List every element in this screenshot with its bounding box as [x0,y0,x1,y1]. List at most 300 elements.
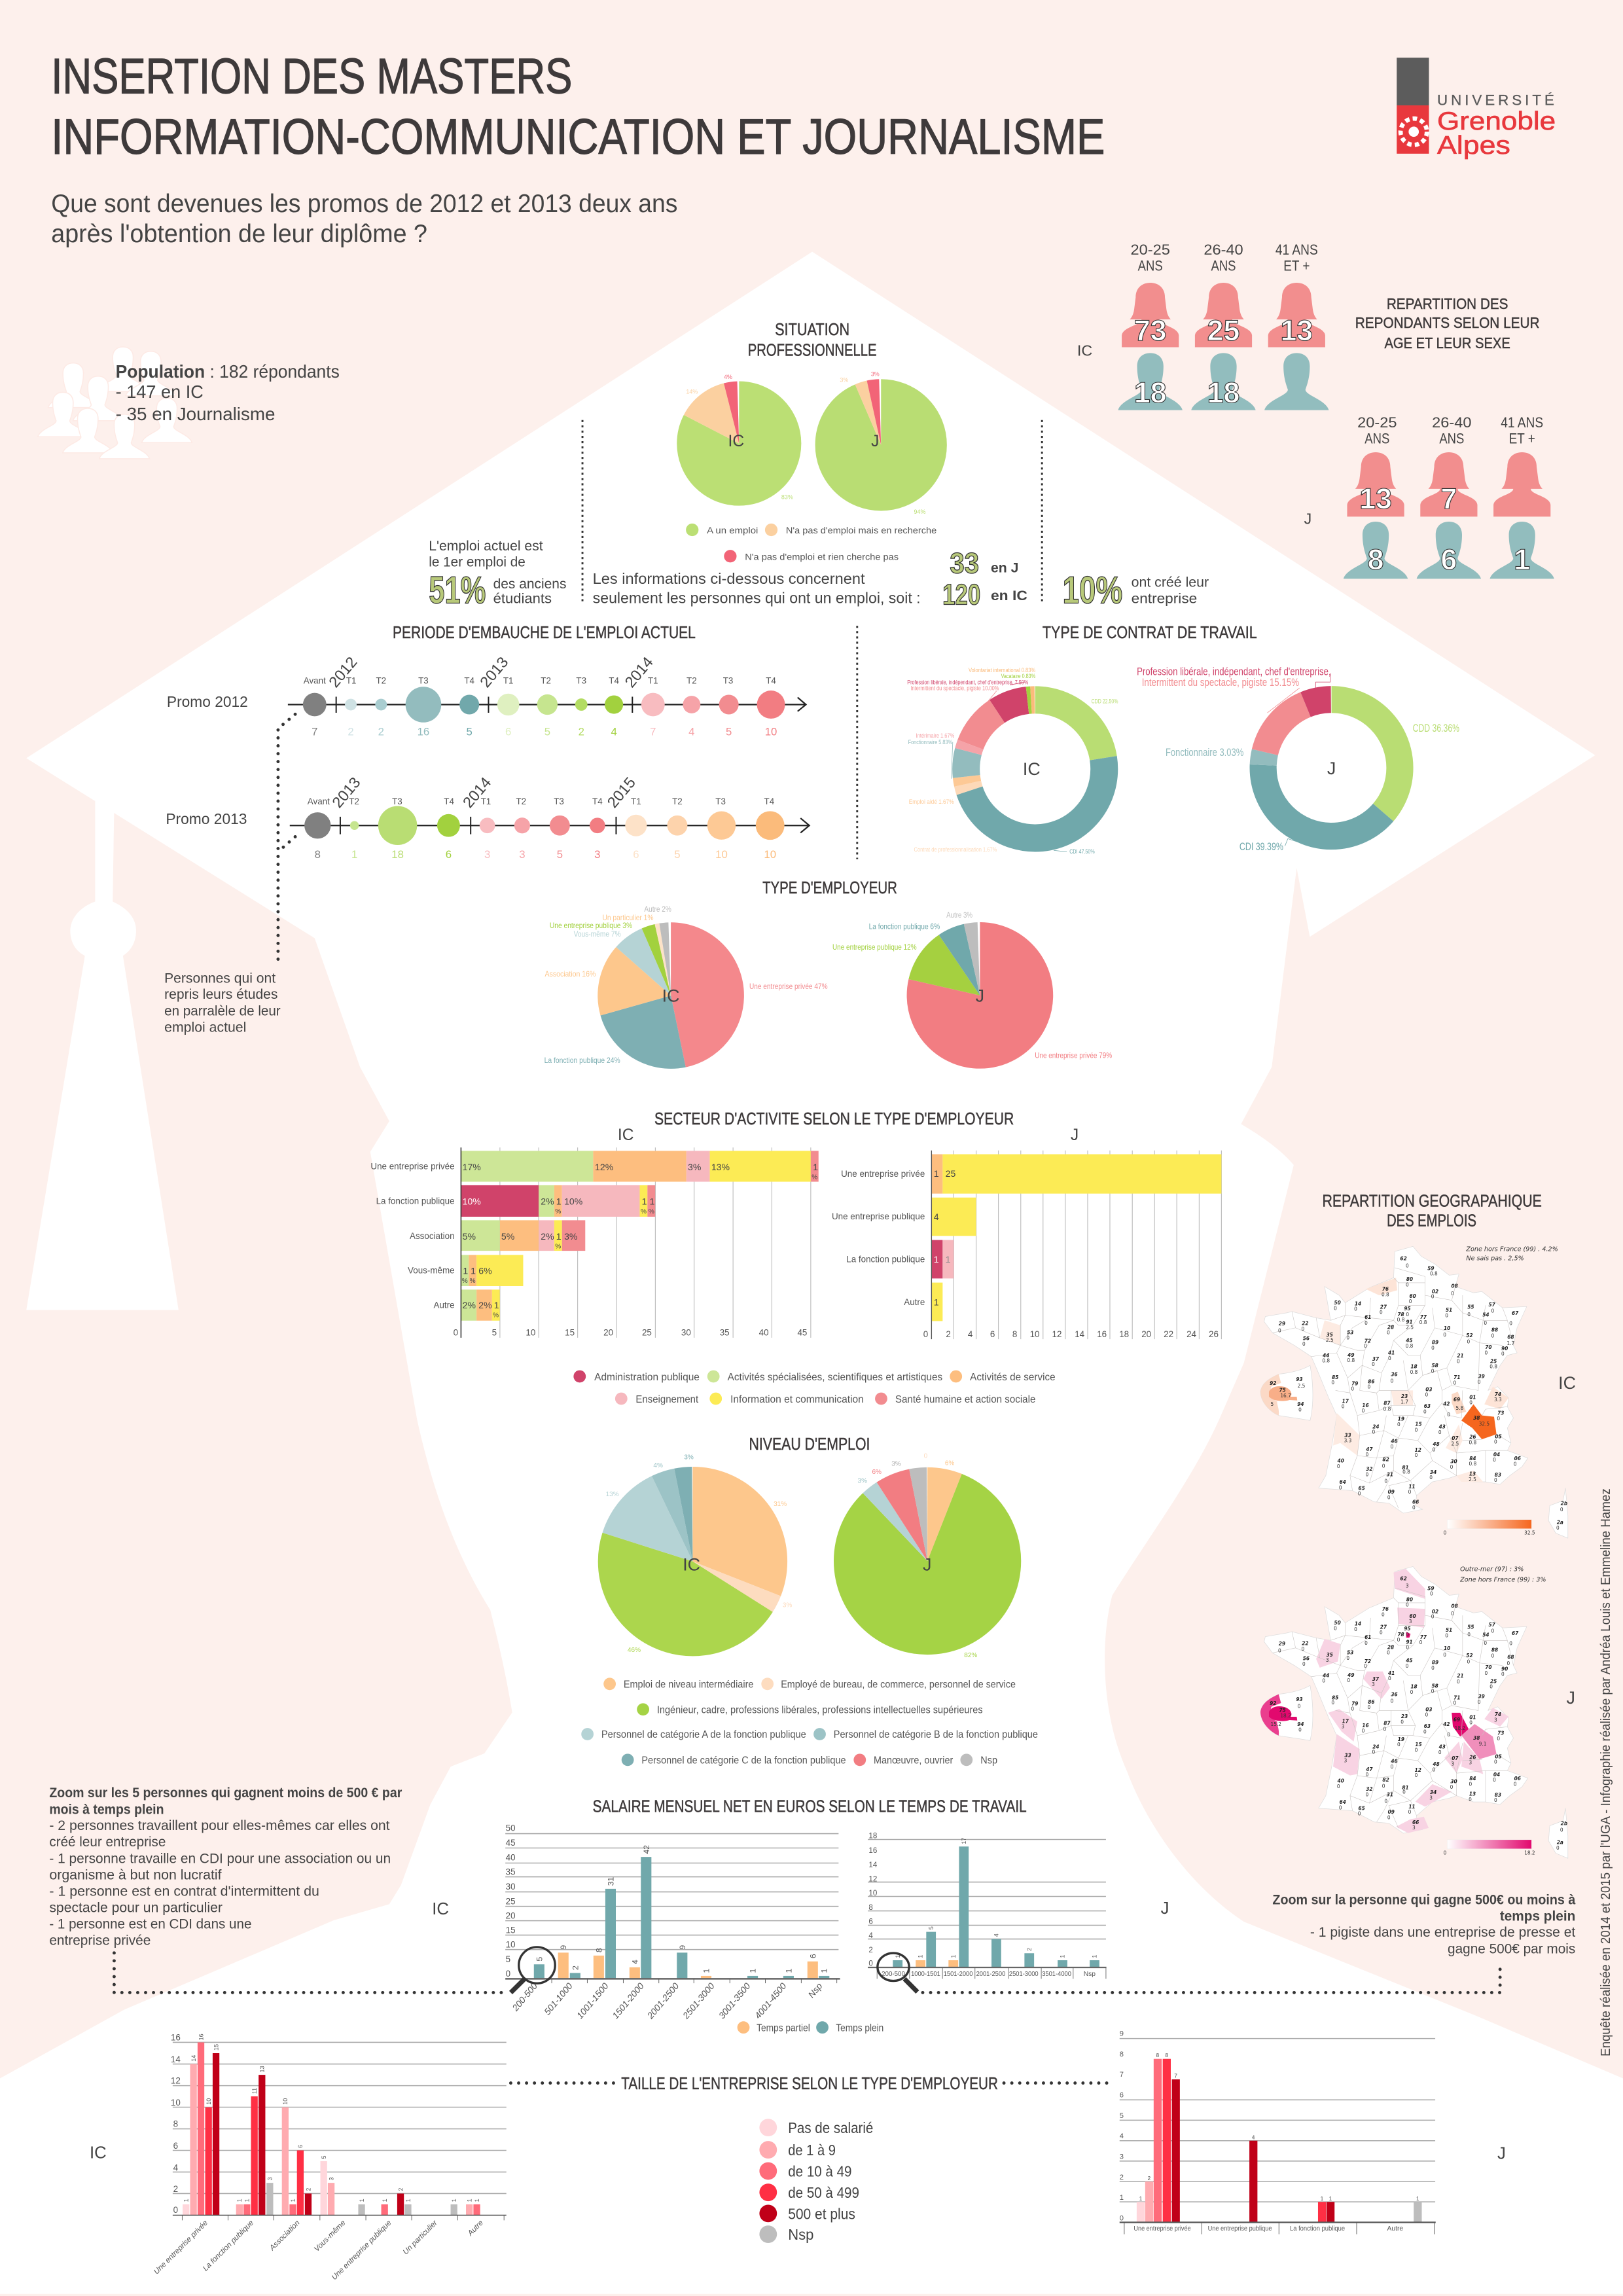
text: resumed studies [164,971,281,1035]
map: France IC: 0 [1484,1320,1487,1326]
timeline: promo 2012: T3 [576,675,586,685]
map: France IC: 0 [1560,1507,1563,1513]
map: France IC: 0 [1372,1361,1375,1367]
colour scale J: 18.2 [1524,1850,1535,1856]
map: France IC: 90 [1501,1346,1508,1352]
age groups J: 26-40 [1432,414,1472,431]
bar chart: salaire IC: 45 [506,1838,516,1848]
text: zoom 5 persons: organisme à but non lucratif [49,1867,222,1882]
bar chart: taille IC: 14 [171,2054,181,2064]
map: France J: 69 [1454,1717,1460,1723]
map: France J: 3 [1326,1657,1329,1663]
map: France IC: 0.8 [1383,1406,1391,1412]
timeline: promo 2012: 2 [378,726,384,738]
credit vertical: Enquête réalisée en 2014 et 2015 par l'UGA - Infographie réalisée par Andréa Louis et Emmeline Hamez [1598,1488,1613,2056]
map: France IC: 11 [1408,1484,1416,1490]
stacked bar chart: secteur IC: % [555,1208,561,1215]
bar chart: salaire J: 8 [868,1903,873,1912]
map: France IC: 0 [1457,1359,1460,1365]
map: France J: 13 [1469,1791,1476,1797]
bar chart: salaire IC: 15 [506,1926,516,1935]
map: France J: 15.2 [1271,1721,1281,1727]
map: France IC: 16.7 [1280,1393,1291,1399]
map: France J: 87 [1383,1721,1391,1727]
text: zoom 1 person: - 1 pigiste dans une entreprise de presse et [1310,1925,1576,1940]
heading: type d'employeur: TYPE D'EMPLOYEUR [762,879,897,897]
map: France IC: 0 [1412,1505,1416,1511]
map: France J: 0 [1382,1611,1385,1618]
map: France IC: 0 [1362,1408,1365,1414]
legend: taille entreprise: de 1 à 9 [788,2142,836,2159]
map: France J: 61 [1364,1634,1371,1640]
bar chart: taille IC: 3 [267,2178,274,2181]
map: France J: 66 [1412,1820,1419,1825]
bar chart: taille J: Une entreprise privée [1133,2225,1191,2233]
note: employed only: en IC [991,588,1027,603]
map: France IC: 45 [1406,1337,1413,1344]
map: France IC: 0 [1358,1490,1361,1496]
map: France IC: 72 [1364,1338,1371,1344]
timeline: promo 2013: 2015 [604,774,639,811]
map: France IC: 57 [1488,1302,1495,1308]
map: France J: 09 [1388,1809,1395,1815]
map: France J: 0 [1560,1827,1563,1833]
bar chart: salaire IC: 0 [506,1969,510,1979]
donut labels IC: Vacataire 0.83% [1001,673,1035,679]
map: France J: 2a [1557,1839,1563,1845]
map: France IC: 87 [1383,1400,1391,1407]
stacked bar chart: secteur J: 8 [1012,1329,1017,1339]
text: resumed studies: emploi actuel [164,1020,246,1035]
text: zoom 5 persons: - 1 personne travaille en CDI pour une association ou un [49,1851,391,1866]
bar chart: salaire IC: 1501-2000 [610,1981,646,2020]
age groups J: 1 [1514,544,1530,576]
timeline: promo 2012: 2012 [325,654,361,691]
map: France IC: 0 [1366,1471,1368,1477]
bar chart: taille J: 5 [1120,2112,1124,2120]
stat: 10% created a company: ont créé leur [1132,575,1209,590]
heading: situation professionnelle: SITUATION [775,321,849,339]
bar chart: taille J: 7 [1174,2073,1177,2079]
donut labels IC: IC [1023,759,1041,779]
map: France J: 0 [1406,1632,1409,1638]
map: France IC: 15 [1415,1422,1422,1427]
map: France J: 18.2 [1455,1725,1465,1731]
timeline: promo 2013: T2 [672,797,683,806]
legend: niveau: Manœuvre, ouvrier [874,1755,953,1766]
timeline: promo 2013: T3 [715,797,726,806]
bar chart: salaire J: 2 [1026,1948,1033,1951]
timeline: promo 2013: 10 [764,848,776,861]
map: France IC: 0 [1431,1345,1435,1351]
bar chart: salaire IC: 4001-4500 [753,1981,789,2020]
stacked bar chart: secteur IC: % [641,1208,647,1215]
map: France J: 0 [1494,1759,1497,1765]
stacked bar chart: secteur IC: 2% [541,1196,554,1206]
map: France IC: 50 [1334,1300,1341,1306]
map: France IC: 0.8 [1410,1369,1418,1375]
stat: 51% first job: des anciens [493,576,566,592]
map: France J: 0 [1298,1727,1302,1733]
map: France J: 0 [1339,1804,1342,1811]
map: France J: 82 [1382,1777,1389,1783]
bar chart: taille J: 4 [1252,2134,1255,2140]
stacked bar chart: secteur IC: 20 [603,1328,613,1338]
bar chart: taille IC: 1 [183,2198,189,2202]
timeline: promo 2013: T2 [349,797,359,806]
map: France J: 51 [1446,1627,1452,1633]
employeur J labels: J [976,986,984,1006]
bar chart: taille IC: Une entreprise privée [152,2218,209,2276]
donut labels IC: CDI 47.50% [1069,848,1095,855]
map: France IC: 47 [1366,1446,1373,1452]
timeline: promo 2012: T3 [723,675,733,685]
timeline: promo 2012: T2 [687,675,697,685]
map: France IC: 0 [1366,1452,1368,1458]
situation legend: N'a pas d'emploi mais en recherche [786,526,936,535]
map: France J: 56 [1303,1655,1310,1662]
map: France IC: 22 [1302,1320,1309,1327]
map: France J: 0 [1489,1683,1493,1689]
map: France J: 75 [1279,1707,1286,1713]
map: France IC: 0 [1334,1305,1337,1312]
bar chart: taille IC: Vous-même [312,2218,348,2253]
map: France IC: 1.7 [1400,1399,1408,1405]
map: France IC: 0.8 [1382,1291,1389,1298]
map: France IC: 0 [1406,1312,1409,1318]
map: France J: 0 [1467,1632,1471,1638]
map: France IC: 32.5 [1479,1421,1489,1427]
bar chart: salaire J: 0 [868,1959,873,1967]
bar chart: salaire J: 16 [868,1846,877,1855]
map: France IC: 0 [1406,1263,1409,1269]
timeline: promo 2013: Promo 2013 [166,810,247,827]
map: France IC: 27 [1380,1304,1387,1310]
stacked bar chart: secteur IC: 0 [454,1328,458,1338]
map: France J: 22 [1302,1640,1309,1647]
situation legend: A un emploi [707,526,758,535]
map: France IC: 0 [1501,1351,1505,1357]
map: France J: 40 [1338,1778,1344,1784]
timeline: promo 2013: Avant [308,797,330,806]
donut labels J: Fonctionnaire 3.03% [1166,746,1243,759]
stacked bar chart: secteur J: 4 [934,1211,939,1222]
bar chart: salaire J: 14 [868,1861,878,1869]
legend: niveau: Nsp [980,1755,997,1766]
IC and J map labels: IC [1558,1373,1576,1393]
bar chart: salaire IC: 25 [506,1896,516,1906]
map: France IC: 0 [1494,1439,1497,1445]
map: France J: 70 [1485,1664,1492,1670]
stacked bar chart: secteur IC: 15 [565,1328,575,1338]
text: zoom 1 person: Zoom sur la personne qui gagne 500€ ou moins à [1272,1892,1576,1907]
bar chart: salaire J: 2501-3000 [1009,1971,1039,1978]
map: France IC: 0 [1429,1475,1433,1480]
map: France J [1260,1566,1568,1858]
timeline: promo 2012: T1 [503,675,513,685]
heading: niveau d'emploi: NIVEAU D'EMPLOI [749,1435,870,1454]
age groups J: ANS [1364,431,1389,447]
bar chart: taille J: 8 [1120,2051,1124,2058]
map: France J: 0 [1509,1640,1512,1647]
bar chart: taille J: 6 [1120,2092,1124,2100]
map: France J: 50 [1334,1620,1341,1626]
text: zoom 5 persons [49,1785,402,1948]
stacked bar chart: secteur J: 24 [1186,1329,1197,1339]
bar chart: taille IC: 3 [328,2178,334,2181]
note IC outside France: Zone hors France (99) . 4.2% [1465,1246,1558,1253]
timeline: promo 2012: 2 [579,726,584,738]
map: France IC: 29 [1279,1321,1285,1327]
map: France J: 0 [1457,1679,1460,1685]
map: France J: 0 [1497,1736,1500,1742]
map: France J: 43 [1439,1744,1446,1750]
legend: taille entreprise: Pas de salarié [788,2119,873,2136]
age heading: REPARTITION DES [1387,295,1508,312]
pie: niveau IC [645,1514,740,1609]
map: France IC: 0 [1339,1484,1342,1491]
map: France J: 18.2 [1280,1713,1291,1719]
map: France J: 54 [1482,1632,1489,1638]
map: France J: 67 [1512,1630,1519,1636]
map: France J: 95 [1404,1626,1411,1632]
timeline: promo 2013: T2 [516,797,526,806]
label IC taille: IC [90,2144,107,2162]
stacked bar chart: secteur IC: 45 [797,1328,807,1338]
map: France J: 0 [1469,1797,1472,1803]
bar chart: taille IC: Association [268,2219,302,2253]
map: France IC: 0 [1485,1350,1488,1356]
map: France IC: 0 [1354,1306,1357,1312]
map: France IC: 0 [1380,1310,1383,1316]
map: France J: 0 [1388,1676,1391,1681]
pie: employeur IC [634,959,707,1032]
timeline: promo 2012: T2 [376,675,386,685]
map: France J: 38 [1473,1735,1480,1741]
map: France J: 44 [1323,1672,1329,1679]
map: France J: 0 [1423,1729,1427,1735]
map: France IC: 0 [1364,1320,1368,1326]
map: France J: 62 [1400,1575,1407,1582]
employeur IC labels: IC [662,986,680,1006]
bar chart: salaire IC: 40 [506,1852,516,1862]
map: France IC: 83 [1495,1472,1501,1478]
map: France J: 10 [1444,1645,1450,1651]
map: France J: 0 [1302,1646,1304,1652]
legend: secteurs [573,1371,1056,1405]
map: France J: 0 [1351,1706,1354,1712]
map: France J: 0 [1368,1704,1370,1710]
map: France J: 14 [1355,1621,1361,1626]
map: France J: 57 [1488,1622,1495,1628]
legend: taille entreprise: Nsp [788,2226,813,2243]
text: zoom 1 person: temps plein [1500,1909,1575,1924]
map: France J: 0 [1451,1611,1454,1617]
bar chart: taille IC: 6 [173,2141,178,2151]
map: France J: 0 [1331,1700,1334,1706]
map: France IC: 0 [1351,1386,1354,1391]
map: France IC: 18 [1410,1363,1418,1369]
niveau IC labels: 3% [783,1602,792,1609]
map: France J: 3 [1409,1619,1412,1624]
map: France IC: 0.8 [1430,1270,1438,1276]
text: resumed studies: repris leurs études [164,987,277,1002]
legend: taille entreprise: de 50 à 499 [788,2184,859,2201]
stacked bar chart: secteur IC: 1 [494,1300,499,1310]
map: France J: 84 [1469,1776,1476,1782]
map: France J: 05 [1495,1753,1502,1760]
map: France J: 72 [1364,1659,1371,1664]
map: France IC: 2.5 [1406,1325,1414,1331]
stacked bar chart: secteur J: 1 [946,1254,951,1265]
map: France J: 0 [1501,1671,1505,1677]
map: France IC: 0 [1450,1464,1454,1470]
bar chart: taille IC: 1 [382,2198,388,2202]
map: France J: 65 [1358,1805,1365,1811]
map: France J: 0 [1391,1698,1394,1704]
bar chart: taille J: 8 [1156,2053,1160,2058]
map: France IC: 0 [1494,1477,1497,1483]
bar chart: taille IC: 2 [305,2188,312,2191]
age groups IC: 18 [1134,377,1167,409]
map: France J: 77 [1420,1634,1427,1640]
timeline: promo 2013 [166,774,810,861]
map: France J: 0 [1514,1782,1517,1787]
map: France J: 9.1 [1479,1741,1487,1747]
map: France J: 42 [1443,1721,1450,1727]
legend: secteurs: Santé humaine et action sociale [895,1394,1035,1405]
stacked bar chart: secteur J: 1 [934,1297,939,1308]
niveau J labels: 82% [964,1652,977,1659]
map: France IC: 48 [1433,1441,1440,1447]
legend: secteurs: Enseignement [635,1394,699,1405]
timeline: promo 2013: 8 [315,848,321,861]
map: France IC: 0 [1388,1355,1391,1361]
map: France J: 94 [1297,1721,1304,1727]
bar chart: taille IC: 16 [198,2034,204,2040]
age heading: AGE ET LEUR SEXE [1384,334,1510,351]
bar chart: taille IC: 6 [297,2145,304,2148]
employeur IC labels: Autre 2% [644,905,671,914]
map: France J: 74 [1495,1712,1501,1717]
logo: Université Grenoble Alpes: Grenoble [1437,107,1556,135]
map: France J: 3 [1451,1761,1454,1767]
stacked bar chart: secteur J: 22 [1164,1329,1173,1339]
age groups J: 20-25 [1357,414,1397,431]
timeline: promo 2012: 16 [418,726,429,738]
heading: situation professionnelle: PROFESSIONNELLE [748,341,877,359]
map: France IC: 39 [1478,1374,1485,1380]
map: France J: 35 [1327,1652,1333,1658]
bar chart: salaire IC: 50 [506,1823,516,1833]
donut labels J: CDI 39.39% [1240,840,1283,853]
map: France J: 3 [1342,1724,1345,1730]
niveau IC labels: 31% [774,1501,787,1508]
map: France IC: 93 [1296,1376,1303,1382]
bar chart: taille J: 1 [1120,2194,1124,2202]
population text: - 147 en IC [116,382,204,402]
map: France J: 0 [1478,1699,1481,1705]
employeur IC labels: Une entreprise privée 47% [749,982,828,991]
stacked bar chart: secteur IC: 1 [556,1196,562,1206]
timeline: promo 2013: T1 [631,797,641,806]
map: France J: 0 [1400,1719,1404,1725]
age groups IC: 25 [1207,315,1240,347]
bar chart: taille IC: 1 [451,2198,457,2202]
map: France IC: 0.8 [1469,1461,1476,1467]
map: France J: 89 [1432,1660,1438,1666]
map: France IC: 0.8 [1402,1469,1410,1475]
bar chart: taille IC: Une entreprise publique [330,2218,393,2282]
map: France J: 3 [1372,1681,1375,1687]
map: France IC: 0 [1514,1461,1517,1467]
bar chart: salaire J: 5 [928,1926,935,1929]
bar chart: salaire IC: 8 [594,1948,603,1952]
map: France J: 0 [1347,1677,1350,1683]
map: France IC: 89 [1432,1340,1438,1346]
donut labels IC: Contrat de professionnalisation 1.67% [914,846,997,853]
legend: niveau [581,1677,1038,1766]
map: France J: 41 [1388,1670,1395,1676]
bar chart: salaire IC: 501-1000 [542,1981,575,2017]
map: France IC: 0 [1302,1326,1304,1332]
map: France J: 55 [1467,1624,1474,1630]
subtitle: après l'obtention de leur diplôme ? [51,220,427,248]
situation pie labels [686,371,925,515]
age groups IC: ANS [1138,258,1163,274]
bar chart: salaire IC: 9 [559,1945,568,1950]
text: resumed studies: Personnes qui ont [164,971,276,986]
map: France IC: 46 [1391,1438,1398,1444]
map: France IC: 0 [1467,1312,1471,1318]
map: France IC: 05 [1495,1433,1502,1440]
legend: niveau: Personnel de catégorie B de la fonction publique [834,1729,1038,1740]
note: employed only [593,547,1027,611]
map: France J: 06 [1514,1776,1521,1782]
bar chart: salaire IC: 200-500 [510,1981,539,2013]
map: France IC: 28 [1387,1324,1394,1330]
niveau J labels: 3% [858,1477,867,1484]
dotted link: resumed studies [278,714,295,960]
stacked bar chart: secteur IC: 12% [595,1162,614,1172]
map: France J: 2b [1561,1821,1568,1827]
situation pie labels: 83% [781,494,793,501]
map: France J: 0 [1467,1659,1470,1665]
labels IC J secteur [618,1126,1079,1144]
map: France J: 0 [1485,1670,1488,1676]
stacked bar chart: secteur IC: 25 [642,1328,652,1338]
map: France IC: 62 [1400,1255,1407,1261]
situation pie labels: 14% [686,389,698,395]
bar chart: taille IC: 12 [171,2075,181,2085]
map: France IC: 0.8 [1397,1317,1405,1323]
stacked bar chart: secteur IC: 30 [681,1328,691,1338]
map: France J: 0 [1445,1632,1448,1638]
map: France J: 0 [1322,1678,1325,1684]
map: France J: 49 [1347,1672,1354,1678]
map: France IC: 63 [1424,1403,1431,1409]
map: France J: 0 [1384,1799,1387,1804]
colour scale IC [1444,1520,1535,1535]
title: INSERTION DES MASTERS [51,48,572,104]
bar chart: taille IC: 13 [259,2066,266,2073]
map: France IC: 01 [1469,1394,1476,1400]
age groups IC: 41 ANS [1275,242,1318,258]
heading: type de contrat: TYPE DE CONTRAT DE TRAVAIL [1043,624,1257,642]
map: France J: 0 [1484,1640,1487,1646]
stacked bar chart: secteur J: 12 [1052,1329,1061,1339]
subtitle: Que sont devenues les promos de 2012 et 2013 deux ans [51,190,677,218]
